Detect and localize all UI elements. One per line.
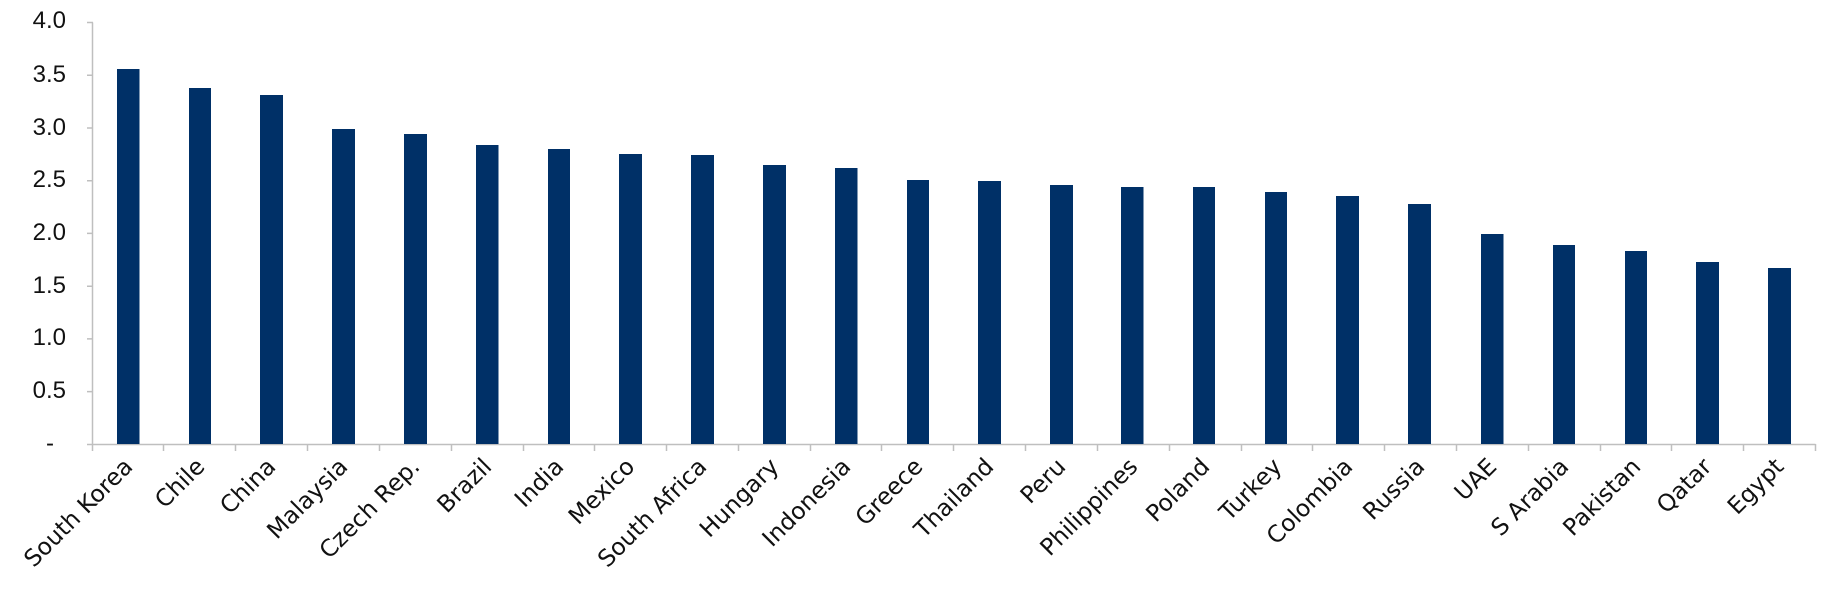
x axis labels: Colombia [1261,452,1358,550]
x axis labels: UAE [1449,452,1502,506]
y axis labels: 1.5 [33,272,66,299]
y axis labels: 2.0 [33,219,66,246]
x axis labels: S Arabia [1485,452,1574,541]
x axis labels: Philippines [1034,452,1143,561]
x axis labels: Peru [1015,452,1071,509]
bars [117,69,1791,444]
y axis labels: 3.0 [33,114,66,141]
y axis labels: - [46,430,54,457]
y axis labels: 0.5 [33,377,66,404]
x axis labels: Greece [850,452,928,531]
x axis labels: Russia [1357,452,1430,525]
x axis labels: China [214,452,281,519]
x axis labels: Thailand [908,452,999,544]
y axis labels [33,7,66,457]
x axis labels: Czech Rep. [314,452,425,564]
x axis labels: South Africa [592,452,712,573]
y axis labels: 4.0 [33,7,66,34]
x axis labels: Turkey [1213,452,1287,527]
x axis labels: Malaysia [261,452,353,545]
y axis labels: 1.0 [33,324,66,351]
x axis labels: Chile [149,452,210,514]
x axis labels: Brazil [431,452,497,518]
x axis [87,444,1816,451]
x axis labels: India [509,452,569,513]
x axis labels [18,452,1789,573]
x axis labels: Poland [1140,452,1215,527]
x axis labels: Mexico [563,452,640,530]
x axis labels: Qatar [1651,452,1718,519]
x axis labels: Hungary [694,452,784,543]
y axis labels: 2.5 [33,166,66,193]
x axis labels: Egypt [1722,452,1789,520]
y axis [87,22,93,444]
y axis labels: 3.5 [33,61,66,88]
x axis labels: Pakistan [1557,452,1646,542]
x axis labels: Indonesia [756,452,856,552]
x axis labels: South Korea [18,452,138,572]
